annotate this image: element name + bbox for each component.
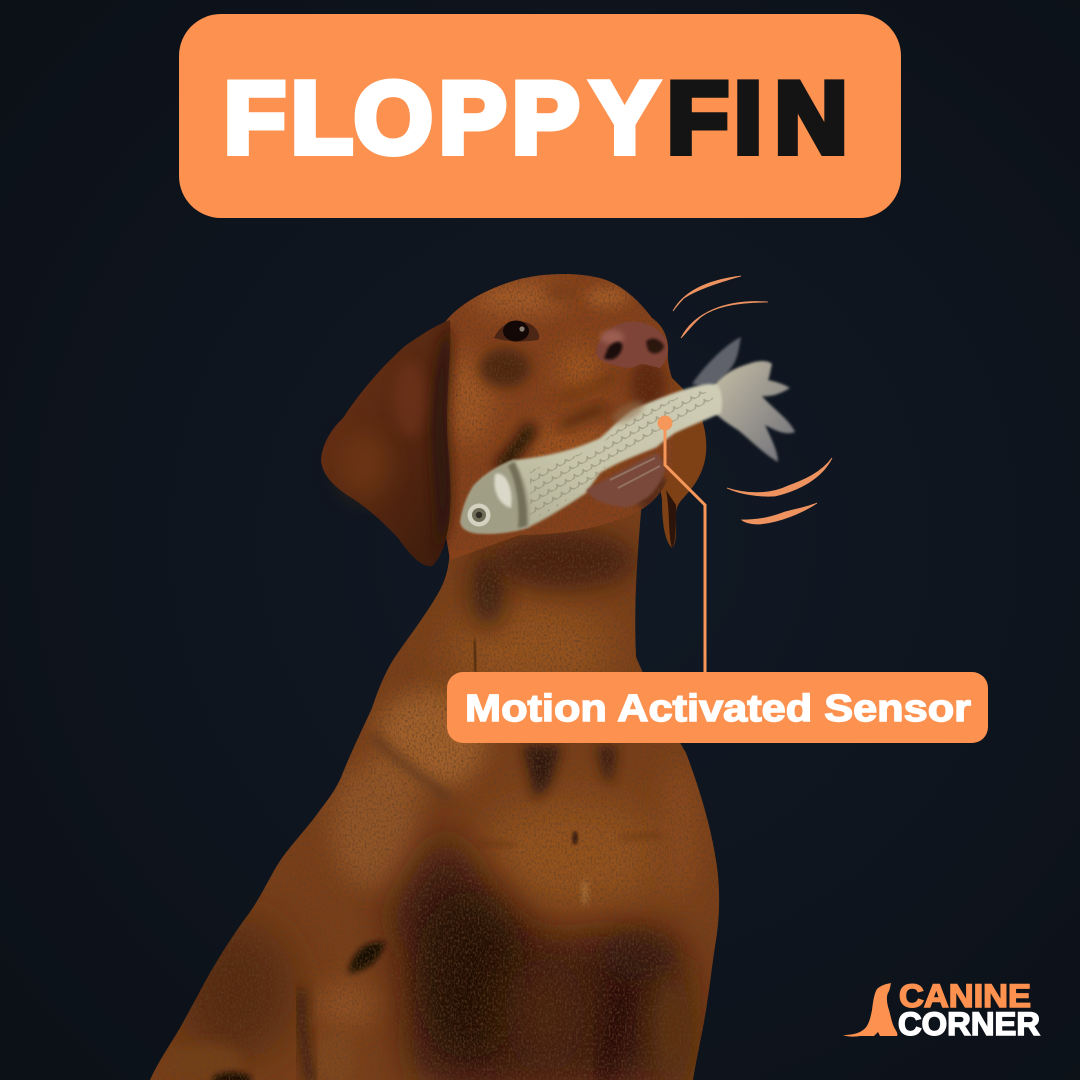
left leg lit — [315, 981, 375, 1029]
ear inner shadow and highlights — [431, 325, 450, 550]
title banner — [179, 14, 901, 218]
dog ear — [321, 320, 450, 566]
callout connector — [658, 416, 705, 674]
logo wordmark: CORNER — [898, 1006, 1040, 1042]
motion lines — [673, 276, 832, 524]
elbow hollow — [348, 942, 385, 974]
logo wordmark: CANINE — [899, 978, 1031, 1014]
logo: Canine Corner — [843, 978, 1040, 1042]
shadow under eye — [479, 348, 531, 388]
title text: FIN — [667, 62, 848, 174]
logo wordmark — [898, 978, 1040, 1042]
dog eye — [494, 320, 539, 342]
deep shadow lower chest — [388, 825, 688, 1080]
neck base V shadows — [522, 745, 562, 800]
lit areas — [475, 800, 665, 910]
dog nose — [596, 322, 668, 368]
dog body and neck — [140, 500, 740, 1080]
title text — [224, 62, 848, 174]
fish body — [461, 384, 722, 533]
dog photo illustration — [140, 270, 795, 1080]
logo dog icon — [843, 983, 897, 1037]
fish scales — [530, 391, 714, 520]
fish tail — [712, 361, 795, 462]
fish fin — [586, 453, 665, 507]
left edge falloff — [175, 920, 295, 1060]
callout label: Motion Activated Sensor — [465, 688, 971, 730]
blur where fish meets mouth — [609, 397, 647, 427]
right front leg — [652, 975, 692, 1080]
fish tail upper fin — [692, 337, 741, 388]
title text: FLOPPY — [224, 62, 658, 174]
fish eye — [468, 504, 490, 526]
chest tuft — [572, 831, 578, 845]
neck shading — [474, 640, 476, 672]
mouth folds — [560, 408, 605, 427]
dog head — [430, 270, 680, 560]
back ear on far side — [650, 378, 706, 548]
fur texture — [140, 500, 740, 1080]
fish toy — [461, 337, 795, 533]
collar crease — [372, 735, 450, 800]
fish head shading — [461, 460, 530, 533]
callout label — [447, 672, 988, 743]
shadow beside muzzle — [630, 359, 666, 411]
